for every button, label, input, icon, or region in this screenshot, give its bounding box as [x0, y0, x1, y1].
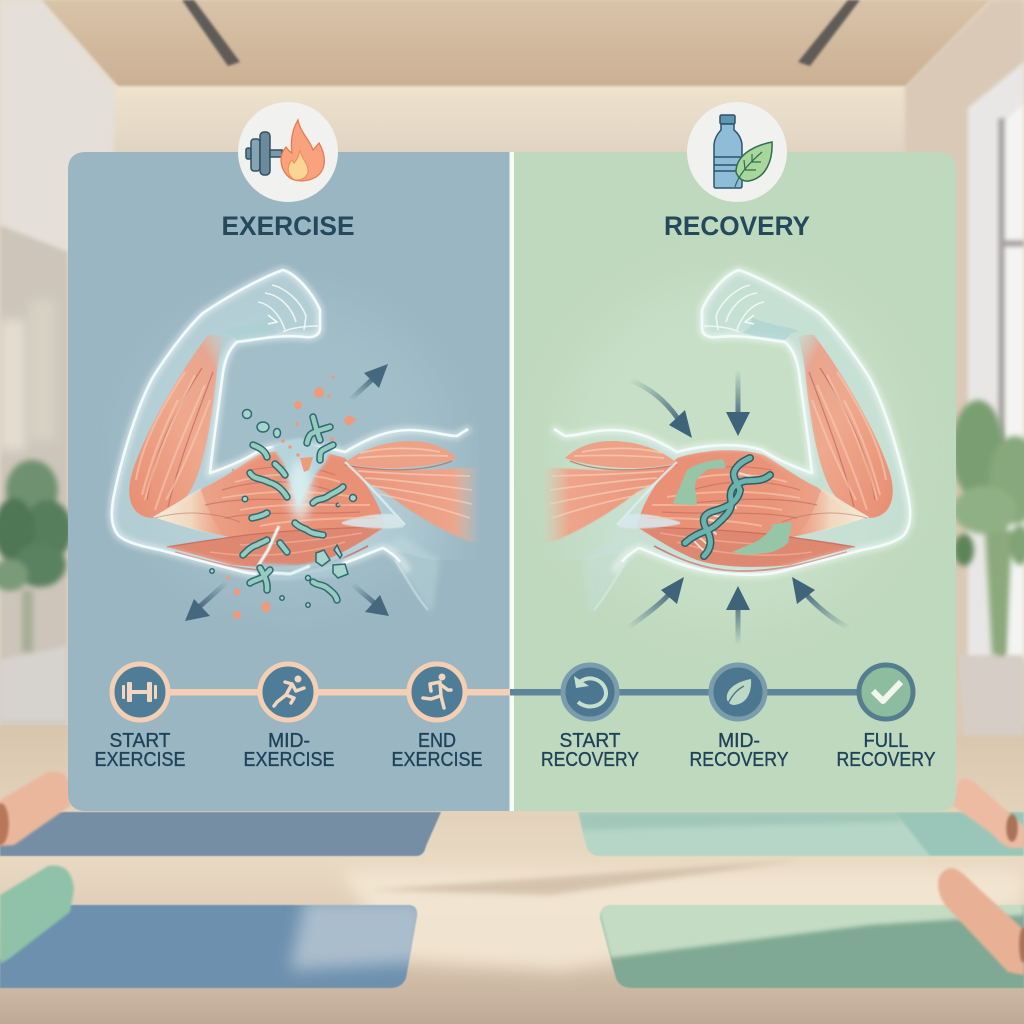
arrow: curved from top left — [630, 380, 692, 438]
tear in muscle — [255, 438, 345, 578]
timeline step: mid exercise — [244, 664, 334, 771]
arrow: down left — [185, 582, 227, 621]
illustration: damaged muscle arm — [112, 270, 480, 621]
yoga mat: back left — [0, 812, 441, 856]
arrow: from top — [726, 370, 750, 436]
dumbbell — [246, 132, 282, 175]
label: RECOVERY — [541, 749, 639, 771]
floor — [0, 725, 1024, 1024]
timeline step: start recovery — [541, 665, 639, 771]
debris — [210, 410, 356, 607]
icon: leaf — [727, 679, 751, 705]
yoga mat: front right — [595, 900, 1024, 990]
label: FULL — [864, 730, 908, 752]
label: EXERCISE — [94, 749, 186, 771]
panel: recovery background — [514, 152, 956, 811]
panel glow: exercise — [130, 300, 450, 600]
flame — [281, 120, 324, 181]
yoga mat: front left — [0, 900, 425, 990]
left wall — [0, 0, 115, 725]
head — [438, 674, 446, 680]
label: START — [560, 730, 620, 752]
yoga mat: back right — [578, 812, 1024, 856]
helix rungs — [693, 473, 752, 550]
arrow head — [574, 676, 589, 688]
arrow: down right — [352, 584, 389, 616]
arrow: up right — [350, 364, 388, 400]
heading: exercise: EXERCISE — [222, 211, 354, 241]
arrow: from bottom — [726, 586, 750, 645]
label: EXERCISE — [244, 749, 334, 771]
floor light patch — [340, 870, 1024, 970]
heading: recovery: RECOVERY — [664, 211, 810, 241]
label: MID- — [718, 730, 760, 752]
label: MID- — [268, 730, 310, 752]
repair patch: lower — [732, 522, 792, 555]
arm base — [112, 270, 480, 614]
ceiling — [42, 0, 990, 86]
icon: dumbbell and flame — [238, 102, 338, 202]
panel divider — [510, 152, 514, 811]
timeline line: exercise — [140, 689, 510, 696]
illustration: repaired muscle arm — [542, 270, 910, 645]
rolled mats — [0, 771, 1024, 975]
plant stem and foliage — [0, 460, 72, 652]
timeline step: mid recovery — [690, 665, 788, 771]
timeline line: recovery — [510, 689, 886, 696]
timeline step: full recovery — [836, 665, 936, 771]
icon: runner — [423, 682, 451, 708]
ceiling lights — [182, 0, 860, 66]
head — [294, 676, 302, 682]
back wall — [105, 85, 935, 205]
icon: dumbbell — [122, 682, 157, 702]
label: RECOVERY — [836, 749, 936, 771]
bottle — [714, 115, 742, 188]
right wall and window — [905, 0, 1024, 735]
leaf veins — [735, 152, 762, 187]
panel: exercise background — [68, 152, 510, 811]
helix strand fills — [685, 458, 770, 556]
icon: restart arrow — [578, 678, 606, 707]
label: EXERCISE — [392, 749, 482, 771]
floor shadow streak — [370, 860, 800, 895]
arrow: from bottom left — [628, 577, 684, 628]
DNA helix — [685, 458, 770, 556]
repair patch: upper — [673, 459, 726, 505]
timeline step: end exercise — [392, 664, 482, 771]
helix strand outlines — [685, 458, 770, 556]
plant stem and foliage — [952, 400, 1024, 655]
label: START — [110, 730, 170, 752]
icon: check — [873, 682, 901, 701]
muscle fibre fragments — [243, 417, 343, 600]
icon: water bottle and leaf — [687, 102, 787, 202]
panel glow: recovery — [560, 280, 900, 620]
right plant — [952, 400, 1024, 735]
leaf stem — [726, 686, 744, 708]
timeline step: start exercise — [94, 664, 186, 771]
plant pot — [0, 645, 68, 722]
plant pot — [958, 655, 1024, 735]
arrow: from bottom right — [792, 577, 849, 628]
label: RECOVERY — [690, 749, 788, 771]
icon: sprinter — [274, 682, 304, 706]
arm base — [542, 270, 910, 614]
leaf — [736, 142, 772, 181]
left plant — [0, 460, 72, 722]
label: END — [418, 730, 456, 752]
